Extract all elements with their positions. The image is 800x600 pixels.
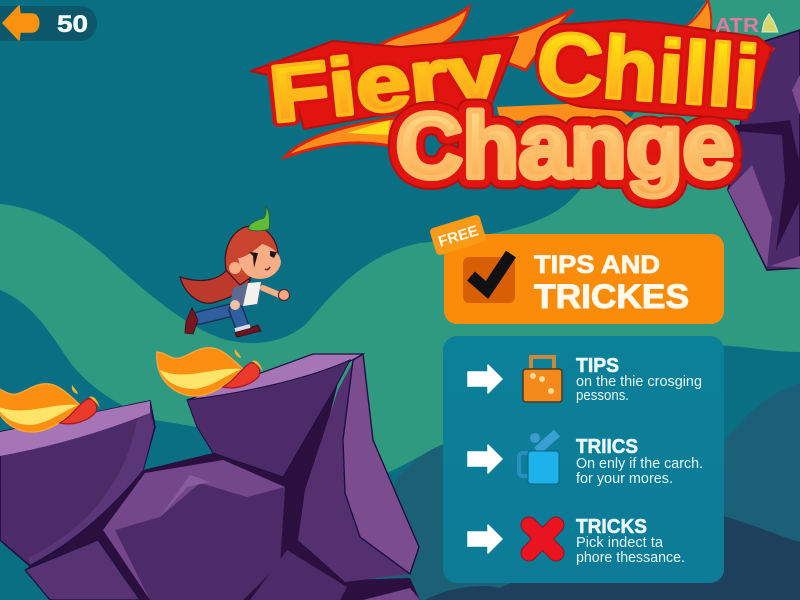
title word: Fiery: Fiery bbox=[265, 26, 506, 139]
row: tips bbox=[468, 355, 702, 404]
title flames bbox=[277, 0, 776, 157]
rock: left ledge bbox=[0, 401, 155, 566]
back arrow bbox=[3, 6, 39, 40]
flaming chilli on left ledge bbox=[0, 384, 100, 432]
score: 50 bbox=[57, 11, 88, 38]
ledge face bbox=[187, 360, 350, 477]
tips text bbox=[576, 355, 702, 404]
face bbox=[238, 244, 281, 279]
tricks text: phore thessance. bbox=[576, 550, 685, 566]
panel: tips and tricks banner bbox=[444, 234, 724, 324]
front shoe bbox=[235, 325, 261, 337]
title plate: Fiery bbox=[251, 37, 518, 129]
title bbox=[251, 13, 772, 197]
title word: Change: Change bbox=[396, 95, 734, 197]
triics text: for your mores. bbox=[576, 471, 673, 487]
tips text: pessons. bbox=[576, 388, 629, 404]
tips text: on the thie crosging bbox=[576, 374, 702, 390]
free tag: FREE bbox=[436, 222, 481, 251]
tips text: TIPS bbox=[576, 355, 619, 377]
back shoe bbox=[185, 308, 198, 334]
icon: rocket badge bbox=[762, 14, 778, 32]
rock: lower left bbox=[25, 540, 140, 600]
arrow bbox=[468, 365, 502, 393]
front leg bbox=[236, 310, 242, 326]
rock top right bbox=[728, 30, 800, 270]
back leg bbox=[199, 310, 232, 318]
tricks text bbox=[576, 516, 685, 566]
ledge top bbox=[187, 354, 363, 400]
rock: lower right bbox=[363, 588, 420, 600]
checkbox bbox=[463, 257, 515, 303]
tricks text: TRICKS bbox=[576, 516, 647, 538]
column light bbox=[343, 354, 419, 574]
rock: lower centre bbox=[250, 550, 347, 600]
eyes bbox=[249, 251, 277, 268]
free tag bbox=[429, 214, 487, 256]
rock shadow base bbox=[25, 383, 420, 600]
arrow bbox=[468, 525, 502, 553]
rock: tall right ledge bbox=[187, 354, 419, 582]
watermark logo: ATR bbox=[715, 15, 760, 37]
row: triics bbox=[468, 433, 703, 487]
tricks text: Pick indect ta bbox=[576, 535, 664, 551]
hair tail bbox=[180, 268, 250, 303]
arrow bbox=[468, 445, 502, 473]
row: tricks bbox=[468, 516, 685, 566]
title word: Fiery: Fiery bbox=[265, 26, 506, 139]
arm bbox=[263, 288, 282, 296]
banner heading line 2: TRICKES bbox=[534, 278, 689, 316]
icon: blue mug bbox=[519, 433, 559, 484]
icon: orange lock bbox=[523, 357, 562, 402]
rock: centre boulder bbox=[103, 460, 285, 600]
title word: Chilli: Chilli bbox=[534, 13, 762, 127]
banner heading line 1: TIPS AND bbox=[534, 251, 660, 279]
column inner bbox=[298, 362, 410, 582]
title plate: Chilli bbox=[536, 20, 772, 120]
title word: Chilli: Chilli bbox=[534, 13, 762, 127]
character: running chilli girl bbox=[180, 206, 290, 337]
triics text: On enly if the carch. bbox=[576, 456, 703, 472]
flaming chilli on right ledge bbox=[157, 348, 263, 396]
score pill bbox=[0, 6, 97, 41]
icon: red cross bbox=[529, 525, 556, 553]
triics text: TRIICS bbox=[576, 436, 638, 458]
panel: tips list bbox=[443, 336, 724, 583]
icon: check mark bbox=[471, 254, 511, 290]
triics text bbox=[576, 436, 703, 487]
torso bbox=[231, 283, 262, 306]
head hair bbox=[225, 226, 278, 285]
title word: Change: Change bbox=[396, 95, 734, 197]
chilli stem bbox=[248, 206, 270, 231]
watermark logo bbox=[715, 14, 778, 37]
rock cluster bottom left bbox=[0, 354, 420, 600]
title word: Change: Change bbox=[396, 95, 734, 197]
